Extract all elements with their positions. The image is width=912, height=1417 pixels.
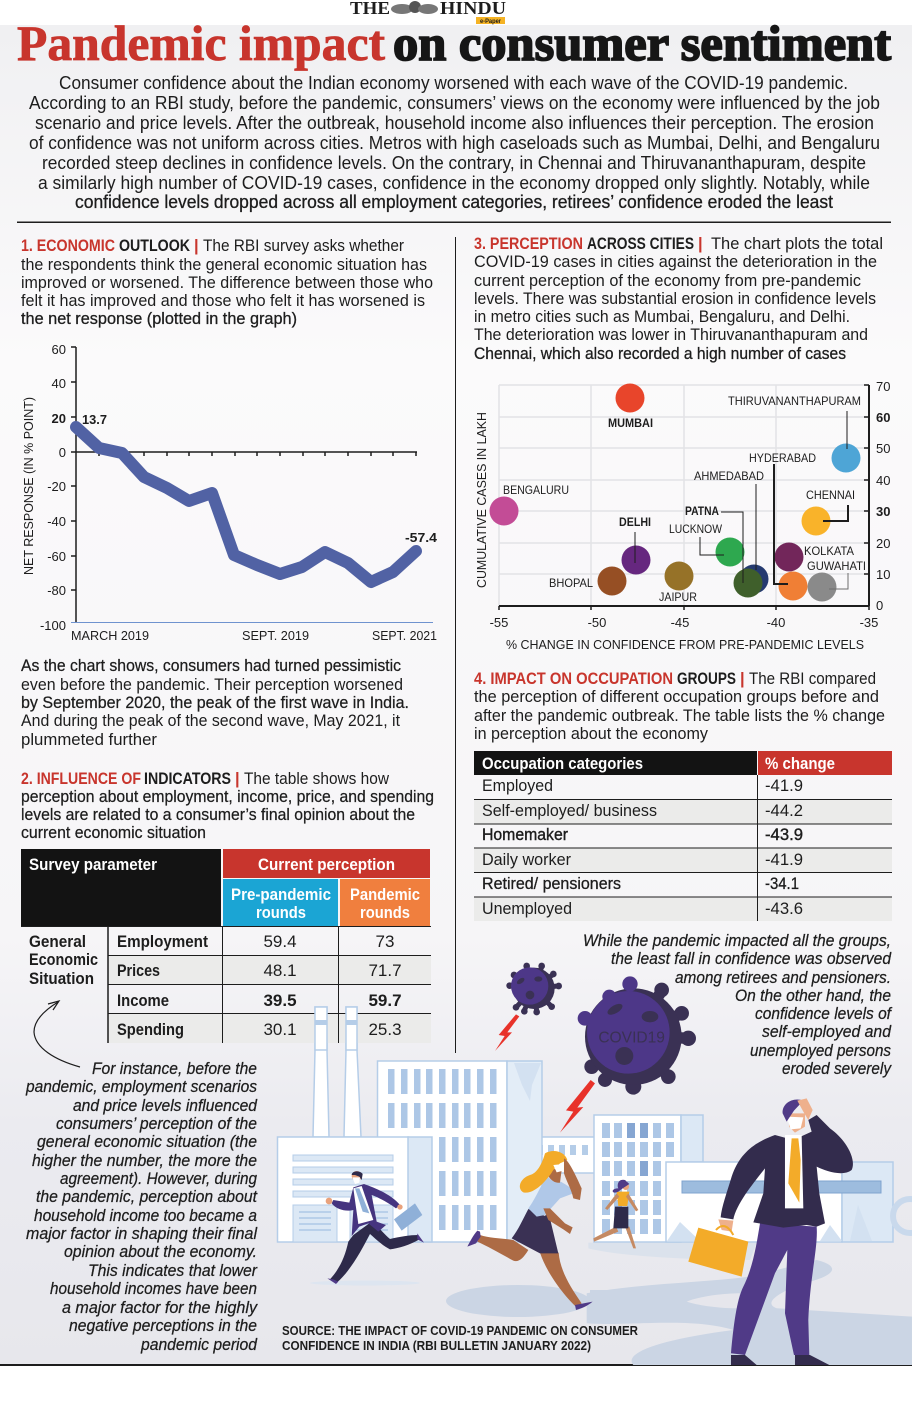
italic note right: the least fall in confidence was observed [611, 949, 891, 968]
table: survey parameters: Spending [117, 1020, 184, 1039]
table: occupation categories: Occupation categories [482, 754, 643, 773]
section 2 text [21, 769, 434, 842]
section 2 text: INDICATORS [144, 770, 231, 788]
section 3 text: | [698, 235, 703, 253]
section 1 text: felt it has improved and those who felt it has worsened is [21, 291, 425, 310]
table: survey parameters [21, 849, 431, 1043]
section 1 text: | [194, 237, 199, 255]
table: occupation categories: -41.9 [765, 850, 803, 869]
italic note left: consumers’ perception of the [56, 1114, 257, 1133]
section 1 text: OUTLOOK [119, 237, 190, 255]
table: survey parameters: Pandemic [350, 885, 420, 904]
line chart: net response: -80 [47, 583, 66, 598]
line chart: net response: SEPT. 2021 [372, 628, 437, 643]
scatter chart: cities: -35 [860, 615, 878, 630]
icon: small lightning bolt [495, 1014, 519, 1051]
section 2 text: The table shows how [244, 769, 390, 788]
masthead logo: e-Paper [480, 19, 502, 25]
scatter chart: cities: 30 [876, 504, 890, 519]
italic note left: For instance, before the [92, 1059, 257, 1078]
intro text block: recorded steep declines in confidence levels. On the contrary, in Chennai and Thiruvananthapuram, despite [42, 153, 866, 173]
scatter chart: cities: LUCKNOW [669, 522, 723, 536]
line chart: net response: -20 [47, 479, 66, 494]
scatter chart: cities: 50 [876, 441, 890, 456]
scatter chart: cities: -40 [767, 615, 785, 630]
scatter chart: cities: -45 [671, 615, 689, 630]
title: on consumer sentiment [393, 15, 891, 71]
factory block [278, 1137, 408, 1242]
line chart: net response: 0 [59, 445, 66, 460]
scatter chart: cities: 10 [876, 567, 890, 582]
paragraph below line chart: by September 2020, the peak of the first wave in India. [21, 693, 409, 712]
scatter chart: cities: 0 [876, 598, 883, 613]
illustration: large standing man with briefcase [688, 1098, 853, 1365]
italic note left: major factor in shaping their final [26, 1224, 258, 1243]
scatter chart: cities: % CHANGE IN CONFIDENCE FROM PRE-PANDEMIC LEVELS [506, 637, 864, 652]
italic note left: pandemic, employment scenarios [25, 1077, 257, 1096]
italic note left [25, 1059, 258, 1354]
italic note right: among retirees and pensioners. [675, 968, 891, 987]
chimney tops over table [315, 1007, 357, 1050]
italic note left: household income too became a [34, 1206, 257, 1225]
scatter chart: cities: -50 [588, 615, 606, 630]
table: occupation categories: Retired/ pensioners [482, 874, 621, 893]
section 1 text: the net response (plotted in the graph) [21, 309, 297, 328]
paragraph below line chart: And during the peak of the second wave, May 2021, it [21, 711, 400, 730]
scatter chart: cities: 40 [876, 473, 890, 488]
section 4 text: 4. IMPACT ON OCCUPATION [474, 670, 673, 688]
intro text block [29, 73, 880, 212]
tall building [378, 1061, 507, 1242]
table: survey parameters: 59.4 [263, 932, 297, 951]
table: survey parameters: General [29, 932, 86, 951]
illustration background scene [278, 1007, 912, 1365]
italic note left: higher the number, the more the [32, 1151, 257, 1170]
table: occupation categories: Self-employed/ business [482, 801, 657, 820]
title [17, 15, 891, 71]
title: Pandemic impact [17, 15, 385, 71]
line chart: net response: -40 [47, 514, 66, 529]
line chart: net response: 60 [52, 342, 66, 357]
section 4 text: after the pandemic outbreak. The table lists the % change [474, 706, 885, 725]
table: occupation categories: Employed [482, 776, 553, 795]
table: survey parameters: rounds [256, 903, 306, 922]
right building with window grid [594, 1115, 681, 1242]
section 2 text: | [235, 770, 240, 788]
line chart: net response [21, 342, 438, 643]
section 1 text: 1. ECONOMIC [21, 237, 115, 255]
source note [282, 1323, 639, 1353]
paragraph below line chart: even before the pandemic. Their perception worsened [21, 675, 403, 694]
scatter chart: cities: DELHI [619, 515, 651, 529]
table: survey parameters: Current perception [258, 855, 395, 874]
section 3 text: 3. PERCEPTION [474, 235, 583, 253]
italic note left: opinion about the economy. [64, 1242, 257, 1261]
italic note right: unemployed persons [750, 1041, 891, 1060]
scatter chart: cities: 60 [876, 410, 890, 425]
scatter chart: cities: HYDERABAD [749, 451, 816, 465]
table: survey parameters: rounds [360, 903, 410, 922]
section 2 text: levels are related to a consumer’s final opinion about the [21, 805, 415, 824]
italic note right: eroded severely [782, 1059, 892, 1078]
line chart: net response: MARCH 2019 [71, 628, 149, 643]
table: survey parameters: Survey parameter [29, 855, 157, 874]
section 2 text: 2. INFLUENCE OF [21, 770, 141, 788]
line chart: net response: SEPT. 2019 [242, 628, 309, 643]
scatter chart: cities: AHMEDABAD [694, 469, 764, 483]
italic note right: While the pandemic impacted all the groups, [583, 931, 891, 950]
icon: large lightning bolt [560, 1080, 595, 1133]
line chart: net response: -57.4 [405, 530, 438, 545]
intro text block: scenario and price levels. After the outbreak, household income also influences their perception. The erosion [35, 113, 874, 133]
table: survey parameters: 25.3 [368, 1020, 402, 1039]
section 3 text: ACROSS CITIES [587, 235, 694, 253]
paragraph below line chart: plummeted further [21, 730, 157, 749]
section 3 text: in metro cities such as Mumbai, Bengaluru, and Delhi. [474, 307, 850, 326]
table: survey parameters: Situation [29, 969, 94, 988]
italic note right: self-employed and [762, 1022, 891, 1041]
scatter chart: cities: -55 [490, 615, 508, 630]
source note: CONFIDENCE IN INDIA (RBI BULLETIN JANUARY 2022) [282, 1338, 591, 1353]
illustration: running man [326, 1171, 424, 1284]
ground shadows [587, 1243, 912, 1365]
italic note left: the pandemic, perception about [36, 1187, 258, 1206]
illustration: running woman [467, 1151, 593, 1310]
scatter chart: cities: JAIPUR [659, 590, 697, 604]
section 4 text: | [740, 670, 745, 688]
scatter chart: cities: CHENNAI [806, 488, 855, 502]
table: occupation categories: -43.9 [765, 825, 803, 844]
italic note left: pandemic period [140, 1335, 257, 1354]
table: occupation categories: % change [765, 754, 835, 773]
table: occupation categories [474, 751, 892, 921]
section 3 text: Chennai, which also recorded a high number of cases [474, 344, 846, 363]
section 2 text: perception about employment, income, price, and spending [21, 787, 434, 806]
scatter chart: cities: MUMBAI [608, 416, 653, 430]
table: survey parameters: 39.5 [263, 991, 297, 1010]
italic note left: negative perceptions in the [69, 1316, 257, 1335]
table: survey parameters: 71.7 [368, 961, 402, 980]
table: occupation categories: -34.1 [765, 874, 799, 893]
scatter chart: cities: CUMULATIVE CASES IN LAKH [474, 412, 489, 588]
chimneys [313, 1007, 329, 1137]
paragraph below line chart: As the chart shows, consumers had turned pessimistic [21, 656, 401, 675]
section 3 text: current perception of the economy from pre-pandemic [474, 271, 861, 290]
line chart: net response: NET RESPONSE (IN % POINT) [21, 397, 36, 575]
scatter chart: cities: THIRUVANANTHAPURAM [728, 394, 861, 408]
section 1 text [21, 236, 433, 328]
section 1 text: The RBI survey asks whether [203, 236, 404, 255]
table: survey parameters: Prices [117, 961, 160, 980]
table: survey parameters: Economic [29, 950, 98, 969]
line chart: net response: 20 [52, 411, 66, 426]
italic note left: a major factor for the highly [62, 1298, 258, 1317]
section 4 text [474, 669, 885, 743]
intro text block: a similarly high number of COVID-19 cases, confidence in the economy dropped only slightly. Notably, while [38, 173, 870, 193]
scatter chart: cities: 70 [876, 379, 890, 394]
table: survey parameters: 59.7 [368, 991, 402, 1010]
table: occupation categories: Daily worker [482, 850, 571, 869]
table: occupation categories: Homemaker [482, 825, 568, 844]
section 3 text [474, 234, 883, 363]
table: survey parameters: 48.1 [263, 961, 297, 980]
italic note right [583, 931, 893, 1078]
line chart: net response: 40 [52, 376, 66, 391]
scatter chart: cities [474, 379, 890, 652]
section 2 text: current economic situation [21, 823, 206, 842]
italic note left: This indicates that lower [88, 1261, 258, 1280]
section 3 text: The chart plots the total [711, 234, 883, 253]
section 4 text: The RBI compared [749, 669, 876, 688]
section 3 text: The deterioration was lower in Thiruvananthapuram and [474, 325, 868, 344]
table: survey parameters: Income [117, 991, 169, 1010]
table: occupation categories: Unemployed [482, 899, 572, 918]
scatter chart: cities: KOLKATA [804, 544, 854, 558]
low building [519, 1137, 595, 1173]
arrow: curved pointer to general economic situation [34, 1001, 80, 1067]
scatter chart: cities: GUWAHATI [807, 559, 866, 573]
section 3 text: COVID-19 cases in cities against the deterioration in the [474, 252, 877, 271]
section 1 text: improved or worsened. The difference between those who [21, 273, 433, 292]
table: survey parameters: Employment [117, 932, 208, 951]
italic note left: agreement). However, during [60, 1169, 257, 1188]
line chart: net response: 13.7 [82, 412, 107, 427]
illustration: small walking woman [593, 1180, 638, 1248]
icon: small virus [506, 963, 562, 1015]
scatter chart: cities: BENGALURU [503, 483, 569, 497]
table: occupation categories: -44.2 [765, 801, 803, 820]
line chart: net response: -60 [47, 549, 66, 564]
wide right building [666, 1162, 842, 1242]
icon: large virus with COVID19 label [578, 976, 696, 1095]
intro text block: According to an RBI study, before the pandemic, consumers’ views on the economy were influenced by the job [29, 93, 880, 113]
scatter chart: cities: BHOPAL [549, 576, 593, 590]
table: survey parameters: 30.1 [263, 1020, 297, 1039]
section 3 text: levels. There was substantial erosion in confidence levels [474, 289, 876, 308]
italic note right: On the other hand, the [735, 986, 891, 1005]
table: survey parameters: 73 [376, 932, 394, 951]
italic note left: and price levels influenced [73, 1096, 257, 1115]
section 1 text: the respondents think the general economic situation has [21, 255, 427, 274]
paragraph below line chart [21, 656, 409, 749]
icon: large virus with COVID19 label: COVID19 [598, 1029, 665, 1046]
scatter chart: cities: 20 [876, 536, 890, 551]
section 4 text: in perception about the economy [474, 724, 708, 743]
table: survey parameters: Pre-pandemic [231, 885, 331, 904]
table: occupation categories: -41.9 [765, 776, 803, 795]
intro text block: confidence levels dropped across all employment categories, retirees’ confidence eroded the least [75, 192, 833, 212]
intro text block: of confidence was not uniform across cities. Metros with high caseloads such as Mumbai, Delhi, and Bengaluru [29, 133, 880, 153]
italic note right: confidence levels of [755, 1004, 893, 1023]
source note: SOURCE: THE IMPACT OF COVID-19 PANDEMIC ON CONSUMER [282, 1323, 639, 1338]
masthead logo [350, 0, 506, 25]
scatter chart: cities: PATNA [685, 504, 719, 518]
italic note left: general economic situation (the [37, 1132, 257, 1151]
table: occupation categories: -43.6 [765, 899, 803, 918]
intro text block: Consumer confidence about the Indian economy worsened with each wave of the COVID-19 pandemic. [59, 73, 848, 93]
section 4 text: GROUPS [677, 670, 736, 688]
line chart: net response: -100 [40, 618, 66, 633]
italic note left: household incomes have been [50, 1279, 257, 1298]
section 4 text: the perception of different occupation groups before and [474, 687, 879, 706]
